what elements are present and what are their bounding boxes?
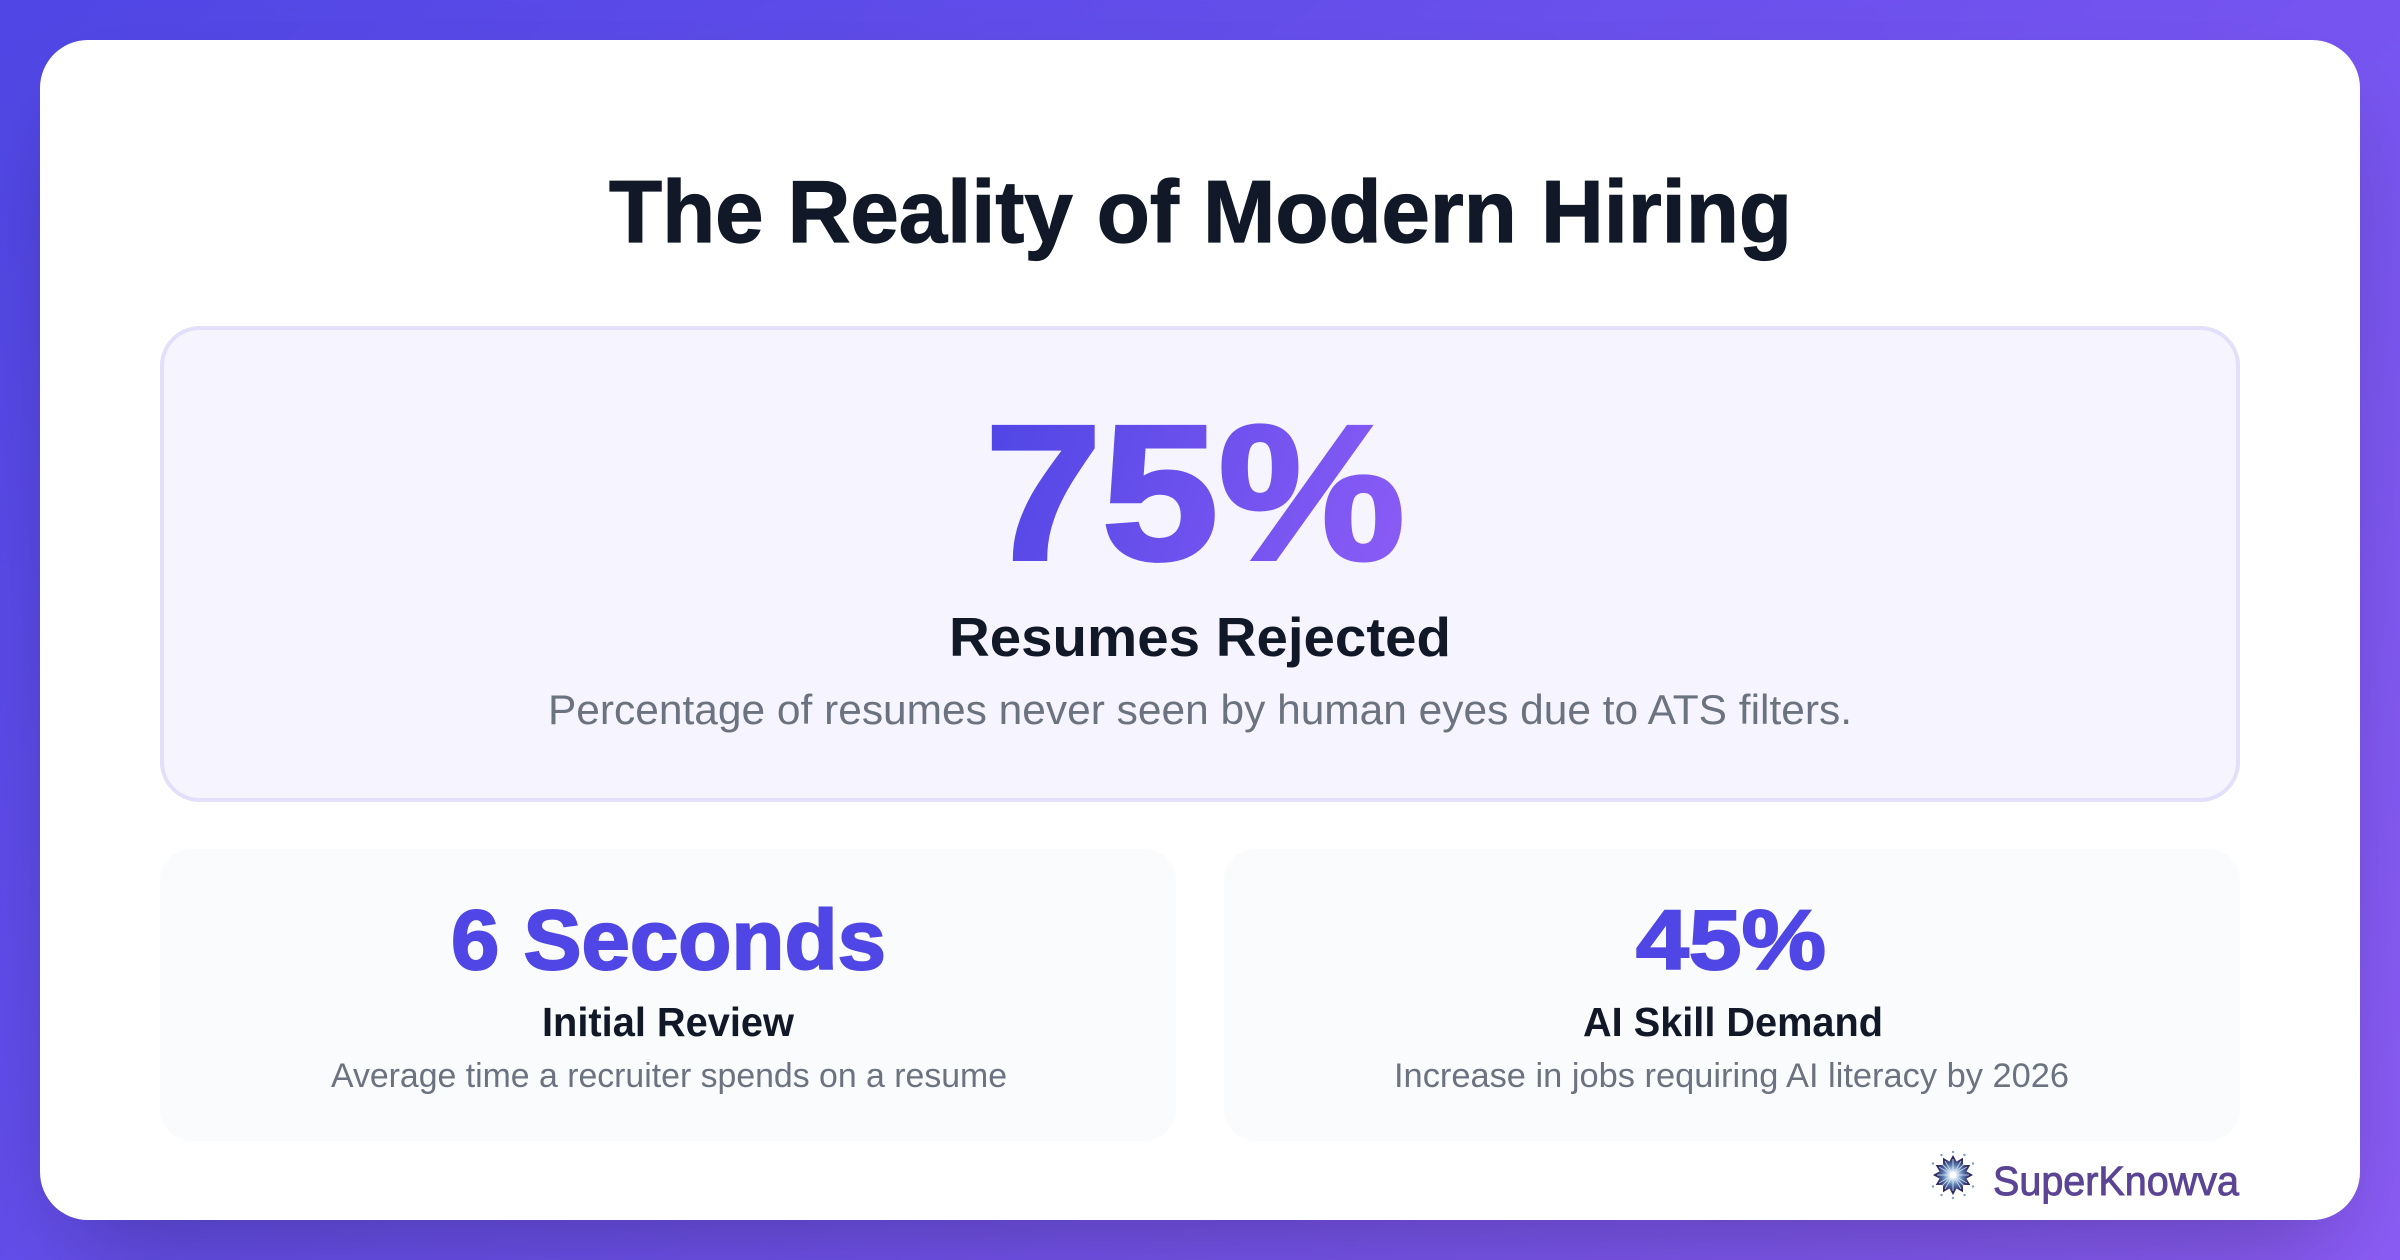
panel: hero stat: [162, 328, 2238, 800]
stat label: AI Skill Demand: [1583, 999, 1883, 1045]
stat number: 45%: [1636, 893, 1826, 987]
hero description: Percentage of resumes never seen by human eyes due to ATS filters.: [548, 686, 1852, 733]
title: The Reality of Modern Hiring: [609, 162, 1792, 261]
panel: initial review: [160, 849, 1176, 1141]
stat description: Average time a recruiter spends on a resume: [331, 1057, 1007, 1095]
panel: AI skill demand: [1224, 849, 2240, 1141]
logo: SuperKnowva: [1932, 1151, 2239, 1204]
stat number: 6 Seconds: [451, 893, 886, 987]
stat label: Initial Review: [542, 999, 794, 1045]
stat description: Increase in jobs requiring AI literacy by 2026: [1394, 1057, 2069, 1095]
icon: star: [1932, 1151, 1974, 1199]
logo wordmark: SuperKnowva: [1993, 1158, 2239, 1204]
hero number: 75%: [985, 385, 1405, 600]
hero label: Resumes Rejected: [949, 606, 1451, 668]
